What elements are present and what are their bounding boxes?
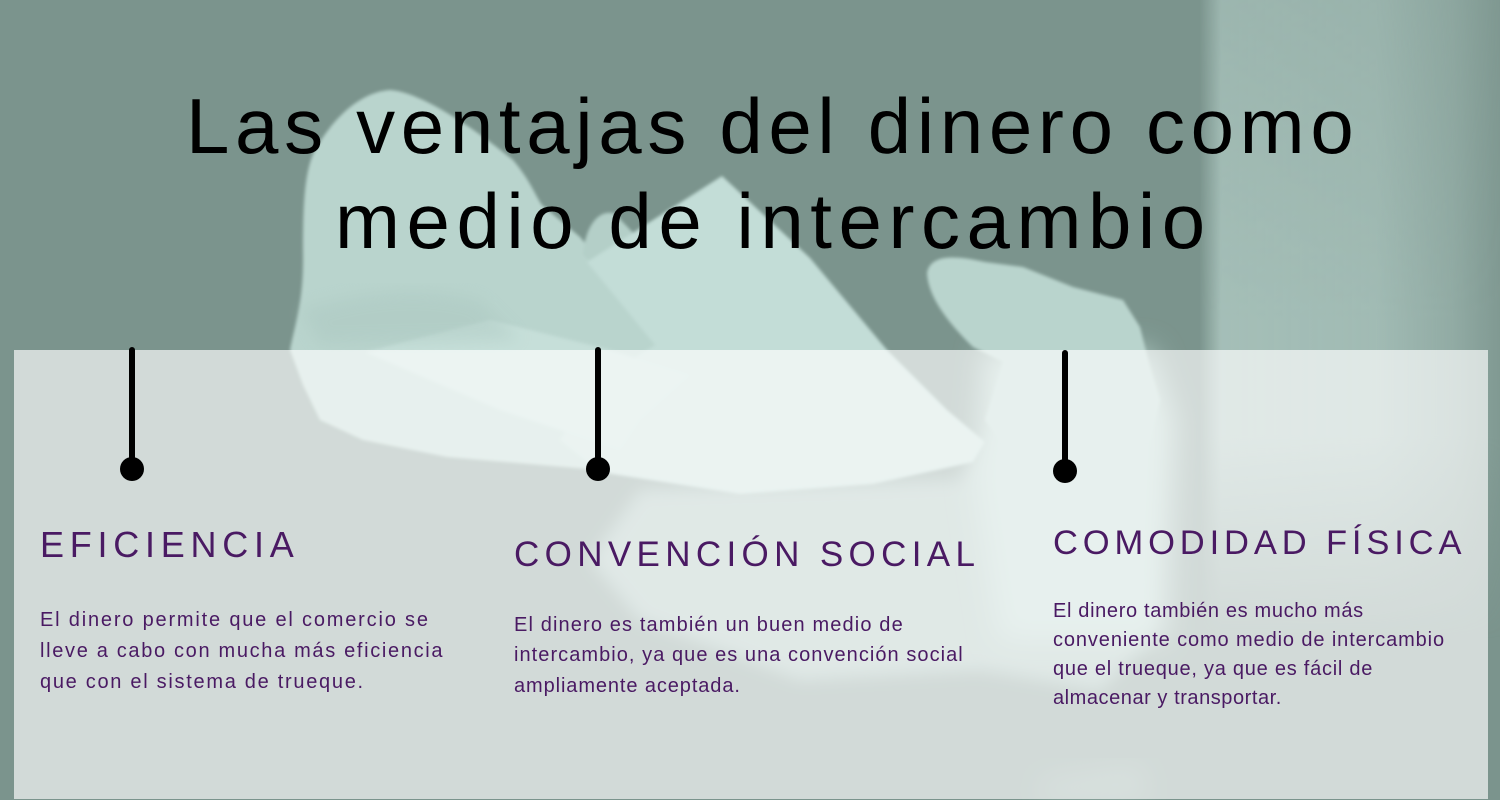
lower hand and shadows — [590, 420, 1150, 690]
title — [186, 82, 1359, 264]
marker: convención social — [586, 347, 610, 481]
small thumb behind bill — [583, 213, 640, 270]
heading: eficiencia: EFICIENCIA — [40, 524, 300, 564]
shading on left hand — [300, 291, 520, 345]
text: eficiencia: lleve a cabo con mucha más eficiencia — [40, 640, 444, 662]
text: comodidad física — [1053, 600, 1445, 708]
text: comodidad física: conveniente como medio de intercambio — [1053, 628, 1445, 650]
heading: comodidad física: COMODIDAD FÍSICA — [1053, 524, 1466, 562]
right hand wrist, soft edge — [975, 350, 1175, 640]
banknotes — [560, 176, 985, 494]
text: eficiencia: El dinero permite que el comercio se — [40, 608, 430, 630]
text: eficiencia — [40, 608, 444, 693]
title: Las ventajas del dinero como — [186, 82, 1359, 170]
left hand — [290, 90, 690, 470]
right hand thumb — [927, 257, 1160, 440]
marker: eficiencia — [120, 347, 144, 481]
text: comodidad física: almacenar y transportar. — [1053, 686, 1282, 708]
heading: convención social: CONVENCIÓN SOCIAL — [514, 535, 980, 574]
text: convención social — [514, 614, 964, 697]
text: convención social: intercambio, ya que es una convención social — [514, 644, 964, 666]
marker: comodidad física — [1053, 350, 1077, 483]
title: medio de intercambio — [335, 176, 1212, 264]
text: convención social: El dinero es también un buen medio de — [514, 614, 904, 636]
text: eficiencia: que con el sistema de trueque. — [40, 671, 365, 693]
text: comodidad física: que el trueque, ya que es fácil de — [1053, 658, 1373, 680]
text: comodidad física: El dinero también es mucho más — [1053, 600, 1364, 622]
translucent lower panel — [14, 350, 1488, 799]
text: convención social: ampliamente aceptada. — [514, 675, 741, 697]
